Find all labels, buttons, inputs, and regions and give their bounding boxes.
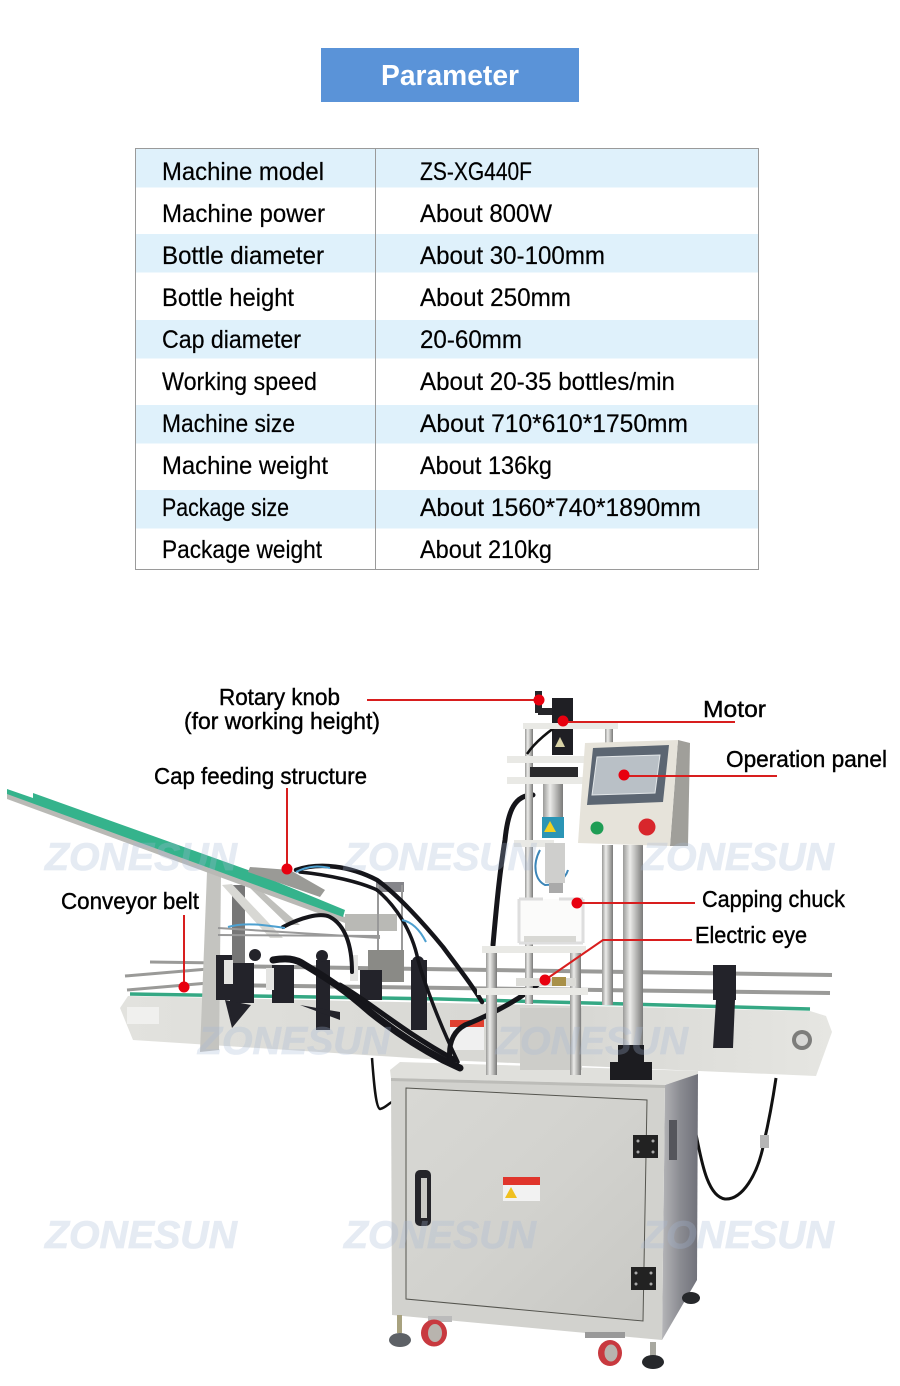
plates [477,723,618,995]
touch screen [587,745,669,805]
chute support frame [200,872,380,1052]
power cables behind cabinet [372,1058,776,1199]
row: package weight: Package weight [162,536,322,564]
row: machine power: About 800W [420,200,552,228]
row: working speed: Working speed [162,368,317,396]
row: machine size [162,410,688,438]
title button: Parameter [321,48,579,102]
row: bottle height: Bottle height [162,284,294,312]
row: package weight: About 210kg [420,536,552,564]
title button: Parameter: Parameter [381,60,519,92]
callout: rotary knob: (for working height) [184,708,380,734]
main columns [486,725,652,1080]
rotary knob [535,691,554,715]
row: package size [162,494,701,522]
sensor [516,977,576,986]
casters and feet [389,1292,700,1369]
callout: electric eye [540,922,807,986]
black clamps and brackets [216,949,736,1048]
callout: motor [558,696,766,726]
row: machine size: Machine size [162,410,295,438]
door hinge bottom [631,1267,656,1290]
side plate [127,1007,159,1024]
callout: capping chuck: Capping chuck [702,886,845,912]
callout: capping chuck [572,886,845,912]
cabinet [390,1062,769,1340]
conveyor green belt [130,994,810,1009]
callout: cap feeding structure: Cap feeding structure [154,763,367,789]
row: machine model: Machine model [162,158,324,186]
callout: operation panel: Operation panel [726,746,887,772]
row: machine weight [162,452,552,480]
row: package weight [162,536,552,564]
watermarks: ZONESUN [343,1214,537,1257]
warning label [503,1177,540,1201]
chuck body [545,843,565,883]
cap feeding head [248,867,404,982]
conveyor base [120,994,832,1076]
watermarks: ZONESUN [641,1214,835,1257]
row: machine weight: Machine weight [162,452,328,480]
row: bottle diameter: Bottle diameter [162,242,324,270]
cabinet door [406,1088,647,1321]
motor cables [527,722,563,754]
spindle [543,784,563,818]
red stop button [638,818,656,836]
callout: operation panel [618,746,887,780]
callout: conveyor belt [61,888,200,992]
row: working speed [162,368,675,396]
callout: electric eye: Electric eye [695,922,807,948]
row: bottle diameter [162,242,605,270]
parameter table [136,148,758,570]
door hinge top [633,1135,658,1158]
machine illustration [7,691,832,1369]
callout: conveyor belt: Conveyor belt [61,888,200,914]
row: bottle diameter: About 30-100mm [420,242,605,270]
row: machine power [162,200,552,228]
row: machine model [162,158,532,186]
callout: rotary knob: Rotary knob [219,684,340,710]
column base [610,1045,652,1080]
capping head [477,691,618,995]
door handle [415,1170,431,1226]
side fitting [669,1120,677,1160]
watermarks: ZONESUN [641,836,835,879]
blue clutch [542,817,564,838]
row: cap diameter: Cap diameter [162,326,301,354]
turntable [530,767,578,777]
row: package size: About 1560*740*1890mm [420,494,701,522]
callout: cap feeding structure [154,763,367,874]
row: cap diameter [162,326,522,354]
callout: motor: Motor [703,696,766,722]
watermarks: ZONESUN [44,836,238,879]
row: working speed: About 20-35 bottles/min [420,368,675,396]
watermarks: ZONESUN [495,1020,689,1063]
rear guide rails [125,962,832,993]
cable connector [760,1135,769,1148]
operation panel [578,740,690,846]
cable bundles [273,795,543,1068]
row: machine power: Machine power [162,200,325,228]
centre plate [520,1008,582,1070]
row: bottle height [162,284,571,312]
watermarks: ZONESUN [197,1020,391,1063]
white valves [224,955,358,990]
end roller [792,1030,812,1050]
watermarks: ZONESUN [44,1214,238,1257]
row: machine model: ZS-XG440F [420,158,532,186]
row: machine size: About 710*610*1750mm [420,410,688,438]
row: bottle height: About 250mm [420,284,571,312]
chuck bracket [519,899,583,943]
row: machine weight: About 136kg [420,452,552,480]
blue air tubes [228,850,568,942]
warning sticker [450,1020,484,1050]
row: cap diameter: 20-60mm [420,326,522,354]
row: package size: Package size [162,494,289,522]
callout: rotary knob [184,684,544,734]
motor [552,698,573,755]
watermarks [44,836,835,1257]
cap chute [7,789,345,923]
watermarks: ZONESUN [343,836,537,879]
green button [590,822,604,834]
